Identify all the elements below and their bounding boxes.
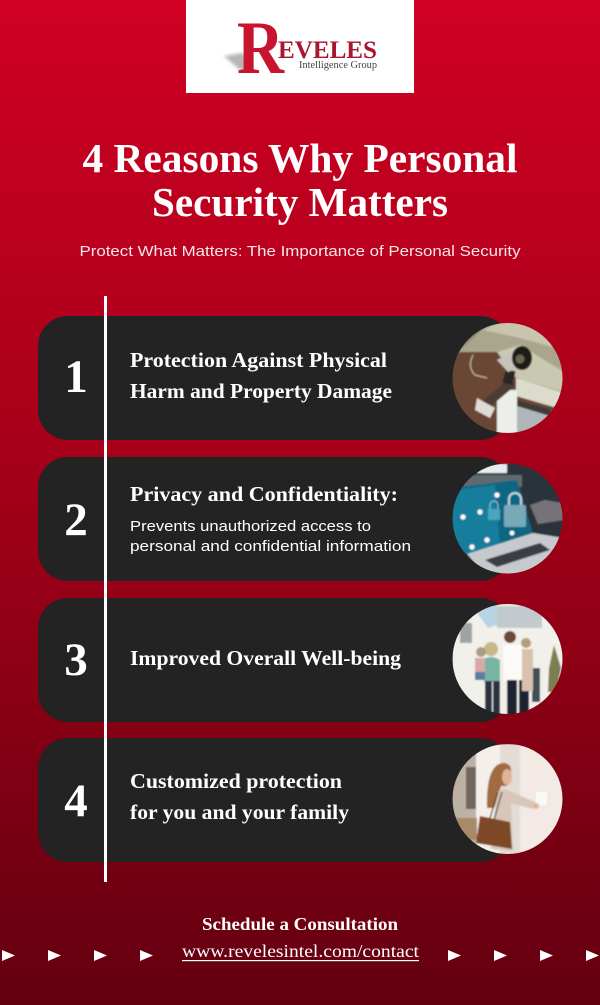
panel: reason 3 [38,598,564,722]
call to action: Schedule a Consultation [202,914,398,934]
number 2: 2 [64,494,88,546]
heading 4: Customized protection [130,769,342,793]
logo wordmark: EVELES [278,37,377,64]
logo wordmark: Intelligence Group [299,60,377,71]
vertical timeline line [104,296,107,882]
heading 2: Privacy and Confidentiality: [130,482,398,506]
number 3: 3 [64,634,88,686]
number 4: 4 [64,775,88,827]
heading 1: Protection Against Physical [130,348,387,372]
heading 1: Harm and Property Damage [130,379,392,403]
title: Security Matters [152,179,448,225]
panel: reason 2 [38,457,564,581]
contact link: www.revelesintel.com/contact [182,941,419,961]
photo: security camera [452,322,564,434]
arrows right [448,950,599,961]
title: 4 Reasons Why Personal [82,135,518,181]
heading 3: Improved Overall Well-being [130,646,402,670]
link underline [182,960,419,961]
description 2: personal and confidential information [130,538,411,555]
title [82,135,518,225]
photo: woman at alarm panel [452,744,564,855]
logo wordmark: R [237,7,285,90]
number 1: 1 [64,351,88,403]
description 2: Prevents unauthorized access to [130,518,371,535]
subtitle: Protect What Matters: The Importance of Personal Security [80,243,521,260]
heading 4 [130,769,350,824]
call to action [182,914,419,961]
photo: laptop with padlock [452,463,564,575]
heading 4: for you and your family [130,800,350,824]
panel: reason 4 [38,738,564,862]
arrows left [2,950,153,961]
description 2 [130,518,411,555]
logo shadow [224,53,252,70]
photo: family at home [452,603,564,716]
logo wordmark [237,7,377,90]
heading 1 [130,348,392,403]
logo panel [186,0,414,93]
panel: reason 1 [38,316,564,440]
